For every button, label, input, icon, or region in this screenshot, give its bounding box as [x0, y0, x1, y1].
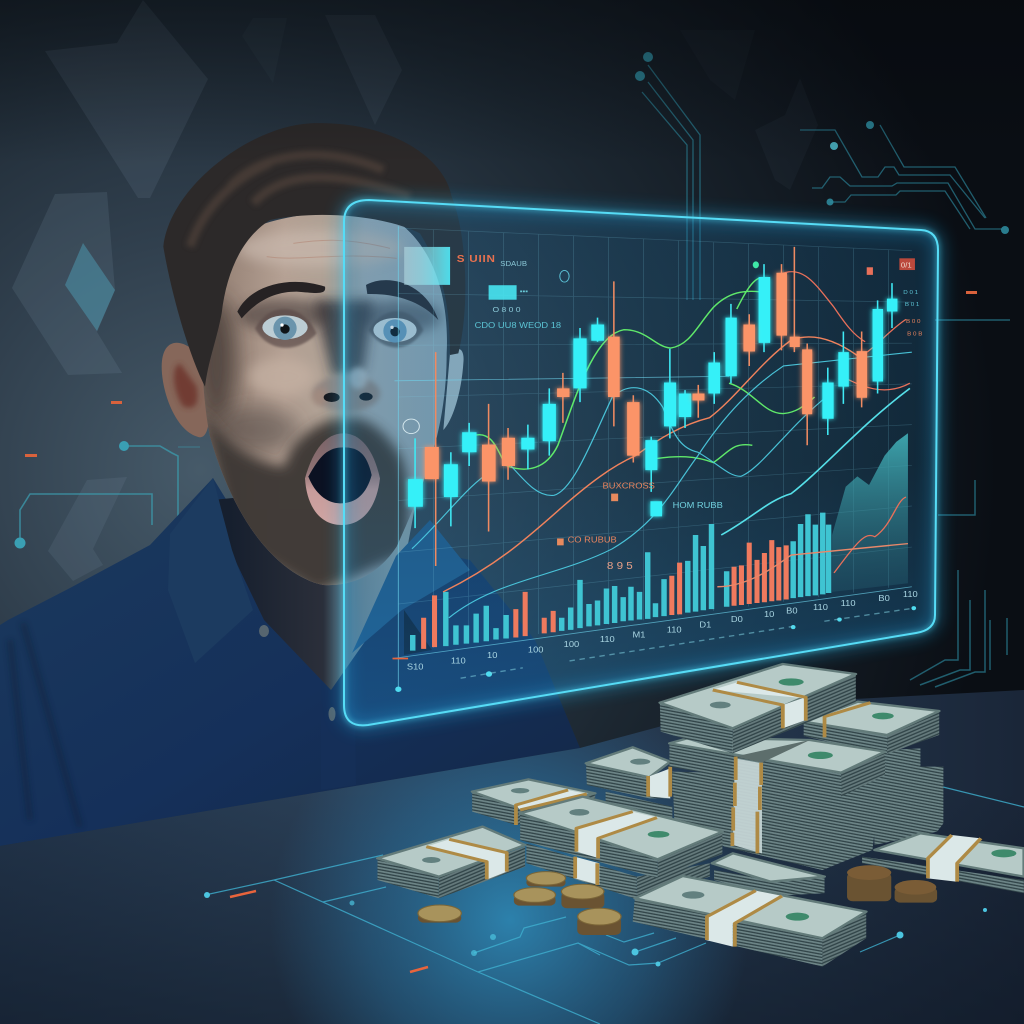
axis labels: B0	[878, 593, 890, 603]
ear left	[162, 343, 209, 437]
chart area	[393, 226, 922, 692]
chart text labels: S UIIN	[457, 253, 496, 265]
timeline dots	[461, 608, 914, 678]
chart text labels: ▪▪▪	[520, 287, 528, 295]
hair	[163, 123, 465, 387]
stack: back center small	[586, 747, 672, 820]
orange tag	[899, 258, 915, 270]
lines: teal	[412, 352, 912, 618]
candlestick wicks orange	[436, 247, 862, 566]
sleeve seam and folds	[10, 623, 80, 827]
forehead highlight	[237, 230, 403, 267]
highlight square	[404, 247, 450, 285]
accent dashes on wall	[25, 291, 977, 457]
circuit traces: left	[20, 446, 200, 540]
line: bright cyan trend	[721, 388, 910, 535]
candlestick wicks cyan	[415, 264, 892, 528]
circuit traces: upper right	[642, 65, 1002, 300]
hair highlights	[190, 155, 410, 247]
axis labels	[407, 589, 918, 671]
placket	[321, 700, 356, 790]
chart text labels: 0/1	[901, 261, 912, 269]
line: long orange	[443, 337, 857, 592]
shirt collar left	[168, 478, 253, 663]
money pile	[378, 664, 1024, 967]
axis labels: 100	[528, 645, 544, 654]
axis labels: 110	[903, 589, 918, 599]
lines: green	[476, 278, 815, 469]
axis labels: S10	[407, 662, 424, 671]
coins	[418, 865, 937, 935]
coin stack 5	[847, 865, 891, 901]
nose	[312, 368, 380, 412]
circuit traces: right side	[910, 320, 1010, 687]
axis labels: 110	[813, 602, 828, 612]
axis labels: 110	[600, 634, 615, 644]
volume bars orange	[424, 540, 786, 649]
line: orange flat	[717, 544, 908, 587]
chart text labels: B 0 0	[906, 319, 921, 325]
chart text labels: D 0 1	[903, 290, 918, 296]
chart grid	[398, 228, 912, 648]
chart text labels: CDO UU8 WEOD 18	[475, 320, 561, 330]
beard	[202, 407, 409, 593]
panel fill	[344, 200, 938, 725]
collar shadow	[404, 610, 432, 655]
ear right	[443, 349, 464, 430]
mouth	[305, 433, 380, 525]
stack: right low	[862, 833, 1024, 893]
small markers	[393, 261, 916, 692]
cheek highlight left	[248, 358, 315, 395]
eyebrow right	[366, 280, 438, 320]
coin stack 1	[526, 872, 566, 887]
axis labels: 110	[667, 625, 682, 634]
area chart	[832, 433, 908, 592]
background hexagon shapes	[12, 0, 818, 581]
stack: left upper	[472, 779, 595, 825]
stack: under center	[526, 843, 710, 899]
stack: front	[633, 876, 866, 967]
eyebrow left	[237, 282, 325, 318]
panel outline	[344, 200, 938, 725]
axis labels: B0	[786, 606, 798, 615]
table circuit nodes	[204, 892, 987, 966]
chart text labels: B 0 1	[905, 302, 919, 308]
table accent dashes	[230, 891, 428, 972]
coin stack 4	[577, 908, 621, 935]
table vertical shade	[0, 690, 1024, 1024]
nose bridge shadow	[313, 300, 373, 377]
forehead wrinkles	[267, 240, 397, 258]
axis labels: 10	[764, 610, 774, 619]
shirt collar right	[352, 520, 470, 653]
axis labels: 10	[487, 650, 498, 660]
circuit nodes: left	[14, 441, 129, 548]
chart text labels: 8 9 5	[607, 560, 633, 572]
table blue glow	[290, 736, 730, 1024]
table circuit lines	[205, 787, 1024, 1024]
coin stack 2	[514, 888, 556, 906]
band edges	[732, 757, 761, 853]
socket shadow left	[238, 298, 328, 332]
line: upper red	[780, 272, 910, 573]
man	[0, 123, 580, 846]
chart text labels: O 8 0 0	[492, 306, 521, 314]
temple shadow	[197, 297, 237, 423]
stack: center right low	[712, 853, 825, 896]
layer 3	[672, 772, 881, 822]
stack: center front	[520, 797, 722, 878]
center bands	[733, 758, 762, 853]
volume bars cyan	[413, 513, 829, 651]
stack: left low	[378, 827, 525, 898]
table surface	[0, 680, 1024, 1024]
chart text labels: CO RUBUB	[568, 535, 617, 544]
chart text labels: B 0 B	[907, 332, 922, 337]
cheek shadow	[213, 407, 300, 453]
panel outer glow	[344, 200, 938, 725]
holographic panel	[344, 200, 938, 725]
face shading	[197, 230, 442, 593]
layer 4	[674, 797, 868, 847]
chart text labels: BUXCROSS	[603, 481, 655, 490]
candlestick bodies orange	[425, 273, 867, 482]
chart text labels	[457, 253, 922, 572]
shirt buttons	[259, 625, 336, 721]
chart axes	[393, 226, 912, 689]
stack: top of tall center	[660, 664, 856, 753]
axis labels: 110	[451, 656, 466, 665]
chart text labels: HOM RUBB	[673, 501, 723, 510]
candlestick bodies cyan	[408, 277, 897, 516]
layer 5	[722, 827, 872, 870]
circuit nodes: upper right	[635, 52, 1009, 234]
axis labels: 110	[841, 599, 856, 608]
coin stack 6	[895, 880, 937, 903]
tall stack backing	[672, 772, 881, 870]
head	[162, 123, 465, 593]
axis labels: D1	[699, 620, 711, 629]
axis labels: M1	[633, 630, 646, 639]
eye right	[368, 311, 423, 347]
neck	[212, 480, 420, 690]
eye left	[255, 309, 317, 348]
shirt	[0, 478, 580, 846]
coin single	[418, 905, 461, 923]
cyan legend block	[489, 285, 517, 300]
layer 2	[669, 737, 885, 797]
face skin	[202, 212, 447, 585]
stack: tall center	[669, 737, 885, 870]
socket shadow right	[358, 300, 442, 333]
axis labels: D0	[731, 614, 743, 624]
chart text labels: SDAUB	[500, 259, 527, 268]
coin stack 3	[561, 884, 604, 908]
stack: tall right back	[804, 702, 943, 845]
axis labels: 100	[564, 640, 579, 649]
